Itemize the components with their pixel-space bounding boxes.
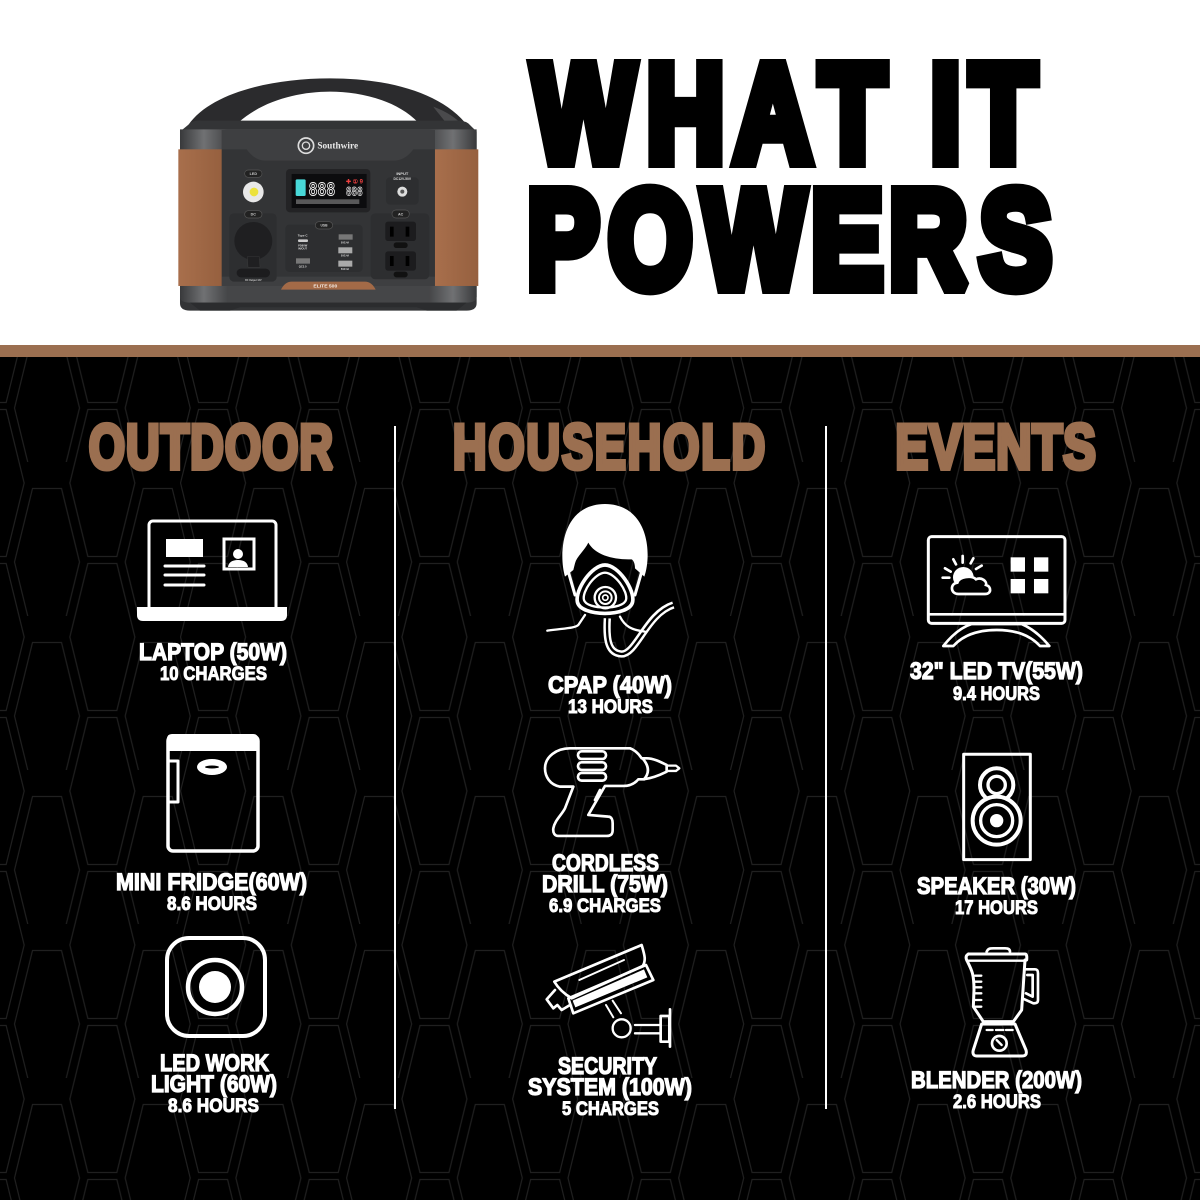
column divider right bbox=[825, 426, 827, 1109]
label: LED work light bbox=[151, 1050, 277, 1117]
label: laptop bbox=[139, 639, 287, 685]
label: security system: SECURITY bbox=[558, 1053, 657, 1080]
USB ports: 5V⁄2.4A bbox=[341, 255, 349, 258]
ELITE 500 badge: ELITE 500 bbox=[313, 284, 337, 290]
LED button and lamp bbox=[243, 170, 264, 202]
Southwire logo bbox=[298, 138, 358, 153]
label: LED work light: LIGHT (60W) bbox=[151, 1071, 277, 1098]
LCD display: 888 bbox=[309, 179, 335, 201]
label: speaker: SPEAKER (30W) bbox=[917, 873, 1076, 900]
label: blender: 2.6 HOURS bbox=[953, 1091, 1041, 1113]
input port bbox=[386, 171, 419, 205]
USB ports: 5V⁄2.4A bbox=[341, 268, 349, 271]
icon: mini fridge bbox=[167, 734, 258, 851]
USB ports: Type C bbox=[298, 234, 308, 238]
title bbox=[527, 37, 1051, 317]
LCD display bbox=[286, 169, 370, 212]
product photo: portable power station bbox=[178, 78, 478, 311]
icon: LED TV bbox=[928, 537, 1065, 646]
label: CPAP: 13 HOURS bbox=[568, 696, 653, 718]
DC outlet bbox=[229, 211, 277, 282]
LCD display: ✚ ① 9 bbox=[346, 178, 364, 185]
label: LED work light: LED WORK bbox=[160, 1050, 269, 1077]
label: blender: BLENDER (200W) bbox=[911, 1067, 1082, 1094]
label: LED TV: 32" LED TV(55W) bbox=[910, 658, 1083, 685]
label: LED TV bbox=[910, 658, 1083, 705]
label: CPAP: CPAP (40W) bbox=[548, 672, 672, 699]
USB ports: PD60W bbox=[298, 243, 308, 247]
title: WHAT IT bbox=[533, 37, 1036, 191]
white header panel bbox=[0, 0, 1200, 345]
label: LED work light: 8.6 HOURS bbox=[168, 1095, 259, 1117]
input port: DC12V-50V bbox=[394, 177, 412, 181]
label: security system: SYSTEM (100W) bbox=[528, 1074, 692, 1101]
heading: household: HOUSEHOLD bbox=[453, 412, 765, 482]
label: cordless drill: CORDLESS bbox=[552, 850, 659, 877]
icon: laptop bbox=[137, 521, 287, 621]
USB ports: USB bbox=[320, 224, 328, 228]
LED button and lamp: LED bbox=[250, 172, 257, 176]
label: security system bbox=[528, 1053, 692, 1120]
label: laptop: 10 CHARGES bbox=[160, 663, 267, 685]
ELITE 500 badge bbox=[281, 282, 376, 290]
USB ports: QC3.0 bbox=[299, 264, 307, 268]
label: blender bbox=[911, 1067, 1082, 1113]
icon: cordless drill bbox=[545, 748, 679, 836]
AC outlets: AC bbox=[398, 212, 404, 216]
input port: INPUT bbox=[396, 171, 409, 176]
label: cordless drill bbox=[542, 850, 668, 917]
label: mini fridge bbox=[116, 869, 307, 915]
column divider left bbox=[394, 426, 396, 1109]
heading: events: EVENTS bbox=[895, 412, 1096, 482]
USB ports bbox=[285, 222, 363, 272]
label: laptop: LAPTOP (50W) bbox=[139, 639, 287, 666]
AC outlets bbox=[371, 210, 429, 279]
brown divider band bbox=[0, 345, 1200, 357]
icon: LED work light bbox=[167, 938, 265, 1036]
DC outlet: DC bbox=[251, 213, 256, 217]
icon: security camera bbox=[547, 945, 670, 1047]
icon: CPAP mask bbox=[547, 504, 674, 654]
label: cordless drill: DRILL (75W) bbox=[542, 871, 668, 898]
label: LED TV: 9.4 HOURS bbox=[953, 683, 1040, 705]
label: mini fridge: 8.6 HOURS bbox=[167, 893, 257, 915]
label: speaker: 17 HOURS bbox=[955, 897, 1038, 919]
label: CPAP bbox=[548, 672, 672, 718]
USB ports: 5V⁄2.4A bbox=[341, 241, 349, 244]
label: cordless drill: 6.9 CHARGES bbox=[549, 895, 661, 917]
label: mini fridge: MINI FRIDGE(60W) bbox=[116, 869, 307, 896]
DC outlet: DC Output 12V bbox=[245, 279, 262, 282]
label: security system: 5 CHARGES bbox=[562, 1098, 659, 1120]
heading: outdoor: OUTDOOR bbox=[89, 412, 333, 482]
icon: blender bbox=[966, 948, 1038, 1056]
icon: speaker bbox=[964, 754, 1030, 860]
LCD display: 888 bbox=[346, 184, 363, 199]
black panel with hexagon pattern bbox=[0, 357, 1200, 1200]
label: speaker bbox=[917, 873, 1076, 919]
Southwire logo: Southwire bbox=[317, 142, 358, 152]
USB ports: IN/OUT bbox=[298, 247, 308, 251]
title: POWERS bbox=[527, 163, 1051, 317]
